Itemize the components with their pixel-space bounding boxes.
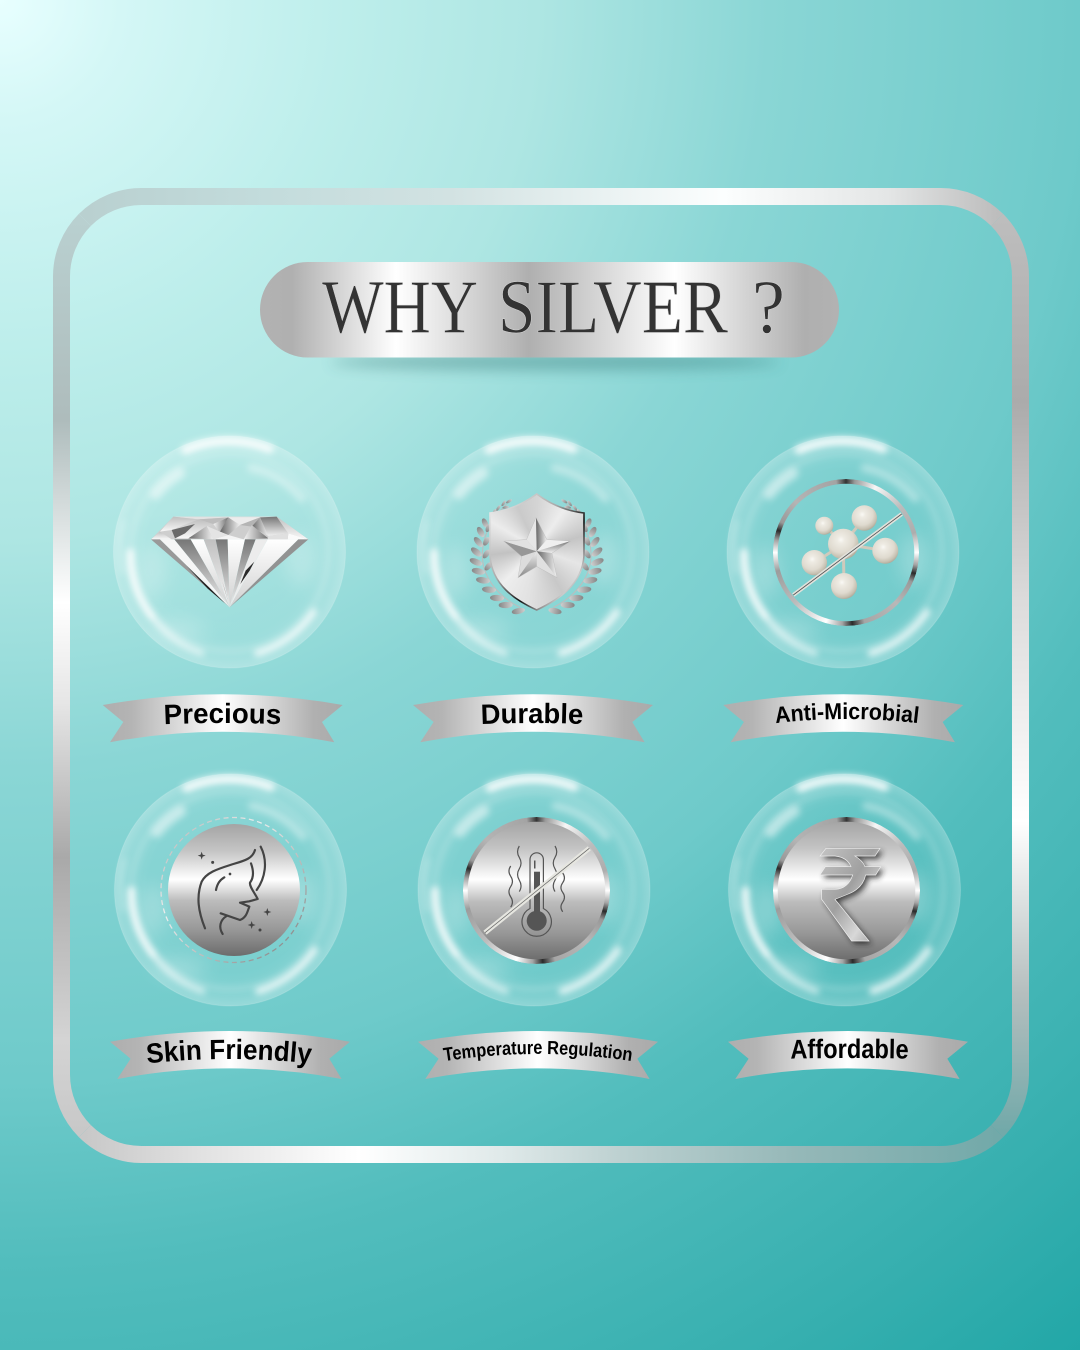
panel: silver frame xyxy=(61,196,1021,1154)
panel: Temperature Regulation xyxy=(418,770,658,1079)
ribbon: Durable: Durable xyxy=(482,702,582,724)
icon: diamond xyxy=(151,517,308,607)
bubble xyxy=(728,774,960,1006)
panel: Durable xyxy=(413,432,653,742)
panel: Anti-Microbial xyxy=(724,432,964,742)
panel: Precious xyxy=(103,433,346,742)
ribbon: Anti-Microbial xyxy=(724,694,964,742)
icon: rupee on silver coin xyxy=(773,817,920,964)
ribbon: Precious: Precious xyxy=(165,702,280,724)
ribbon: Affordable: Affordable xyxy=(791,1038,908,1059)
icon: crossed-out thermometer on silver coin xyxy=(463,817,610,964)
title pill: SILVER xyxy=(498,266,728,350)
ribbon: Affordable xyxy=(728,1031,968,1079)
panel: Skin Friendly xyxy=(110,770,350,1079)
panel: Affordable xyxy=(728,770,968,1079)
bubble xyxy=(114,774,346,1006)
title pill: WHY xyxy=(322,266,478,350)
ribbon: Anti-Microbial: Anti-Microbial xyxy=(776,702,919,724)
icon: face on silver coin xyxy=(161,818,306,962)
title pill xyxy=(260,262,839,370)
ribbon: Temperature Regulation xyxy=(418,1031,658,1079)
title pill: ? xyxy=(752,266,785,350)
ribbon: Durable xyxy=(413,694,653,742)
bubble xyxy=(114,436,346,668)
icon: crossed-out molecule xyxy=(773,479,919,626)
bubble xyxy=(727,436,959,668)
bubble xyxy=(418,774,650,1006)
ribbon: Skin Friendly: Skin Friendly xyxy=(147,1038,312,1068)
ribbon: Skin Friendly xyxy=(110,1031,350,1079)
icon: shield with star and laurel xyxy=(469,494,605,615)
bubble xyxy=(417,436,649,668)
ribbon: Precious xyxy=(103,694,342,742)
ribbon: Temperature Regulation: Temperature Regulation xyxy=(442,1041,632,1061)
